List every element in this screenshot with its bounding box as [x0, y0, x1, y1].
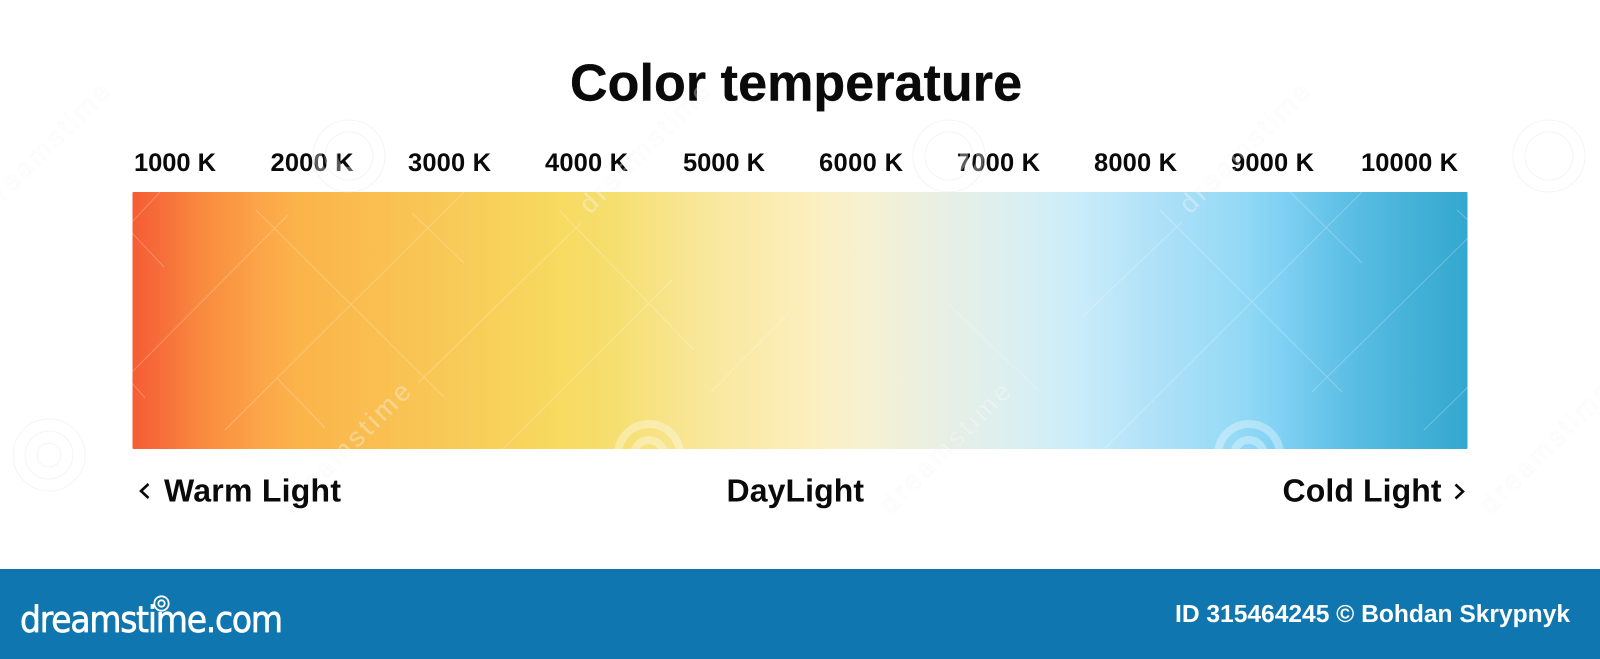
watermark text: [0, 76, 1600, 519]
temperature scale labels: [134, 149, 1459, 177]
warm light label: Warm Light: [164, 472, 341, 508]
watermark text: dreamstime: [1173, 76, 1316, 219]
temperature scale labels: 1000 K: [134, 149, 217, 177]
temperature scale labels: 4000 K: [545, 149, 629, 177]
temperature scale labels: 8000 K: [1094, 149, 1178, 177]
temperature scale labels: 6000 K: [819, 149, 904, 177]
dreamstime logo: dreamstime.com: [20, 598, 283, 641]
watermark text: dreamstime: [274, 376, 417, 519]
watermark text: dreamstime: [874, 376, 1017, 519]
title: Color temperature: [570, 54, 1022, 112]
watermark lattice lines: [132, 192, 1468, 449]
watermark spirals: [13, 120, 1585, 491]
watermark text: dreamstime: [573, 76, 716, 219]
footer banner: [0, 569, 1600, 659]
temperature scale labels: 7000 K: [957, 149, 1041, 177]
temperature scale labels: 5000 K: [683, 149, 766, 177]
temperature scale labels: 10000 K: [1361, 149, 1459, 177]
image id and author credit: ID 315464245 © Bohdan Skrypnyk: [1175, 601, 1570, 628]
temperature scale labels: 2000 K: [270, 149, 354, 177]
cold light label: Cold Light: [1282, 472, 1442, 508]
temperature scale labels: 3000 K: [408, 149, 492, 177]
temperature scale labels: 9000 K: [1231, 149, 1315, 177]
gradient bar: warm to cold colour temperature: [132, 192, 1468, 449]
daylight label: DayLight: [726, 472, 864, 508]
